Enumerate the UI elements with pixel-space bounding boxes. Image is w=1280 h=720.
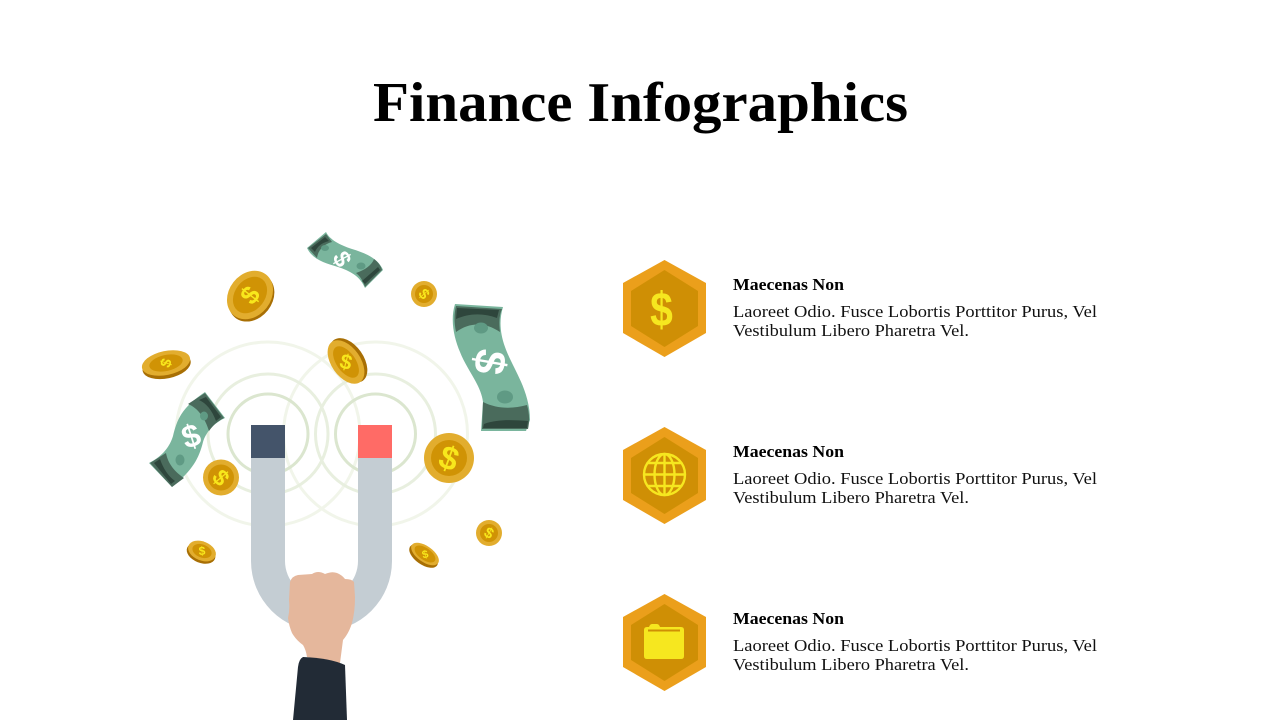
left banknote: $ xyxy=(177,416,205,456)
icon: hexagon with globe xyxy=(623,427,706,524)
large banknote: $ xyxy=(463,346,516,378)
coin: small lower left: $ xyxy=(198,544,206,558)
coin: below left bill xyxy=(203,460,239,496)
sleeve xyxy=(293,657,347,720)
coin: below left bill: $ xyxy=(207,464,235,491)
top banknote xyxy=(307,232,383,288)
item 2: globe xyxy=(623,427,1097,524)
coin: small lower right: $ xyxy=(481,524,497,543)
body text 2: Vestibulum Libero Pharetra Vel. xyxy=(733,488,969,507)
coin: large right xyxy=(424,433,474,483)
icon: hexagon with folder xyxy=(623,594,706,691)
coin: small lower centre xyxy=(405,538,443,572)
top banknote: $ xyxy=(327,247,357,272)
body text 1: Laoreet Odio. Fusce Lobortis Porttitor Purus, Vel xyxy=(733,302,1097,321)
left banknote xyxy=(149,392,225,487)
body text 3: Vestibulum Libero Pharetra Vel. xyxy=(733,655,969,674)
magnetic field rings xyxy=(176,342,468,526)
coin: small lower left xyxy=(184,537,219,568)
icon: hexagon with dollar: $ xyxy=(650,284,673,337)
heading 1: Maecenas Non xyxy=(733,275,845,294)
body text 2: Laoreet Odio. Fusce Lobortis Porttitor Purus, Vel xyxy=(733,469,1097,488)
item 1: finance xyxy=(623,260,1097,357)
body text 2 xyxy=(733,469,1097,507)
icon: hexagon with dollar xyxy=(623,260,706,357)
body text 1 xyxy=(733,302,1097,340)
coin: tilted upper xyxy=(217,262,285,331)
hand holding magnet xyxy=(288,572,355,663)
body text 1: Vestibulum Libero Pharetra Vel. xyxy=(733,321,969,340)
coin: small lower centre: $ xyxy=(421,548,430,562)
coin: small top right xyxy=(411,281,437,307)
horseshoe magnet xyxy=(251,425,392,632)
illustration: magnet attracting money xyxy=(140,232,530,720)
coin: tilted upper: $ xyxy=(234,280,267,310)
coin: far left flat: $ xyxy=(157,356,176,370)
large banknote xyxy=(453,304,530,431)
coin: tilted centre xyxy=(320,331,375,391)
coin: tilted centre: $ xyxy=(337,350,355,375)
coin: far left flat xyxy=(140,346,193,383)
heading 3: Maecenas Non xyxy=(733,609,845,628)
coin: small top right: $ xyxy=(414,286,433,303)
item 3: folder xyxy=(623,594,1097,691)
body text 3 xyxy=(733,636,1097,674)
title: Finance Infographics xyxy=(373,72,908,134)
body text 3: Laoreet Odio. Fusce Lobortis Porttitor Purus, Vel xyxy=(733,636,1097,655)
coin: large right: $ xyxy=(434,437,464,479)
heading 2: Maecenas Non xyxy=(733,442,845,461)
coin: small lower right xyxy=(476,520,502,546)
